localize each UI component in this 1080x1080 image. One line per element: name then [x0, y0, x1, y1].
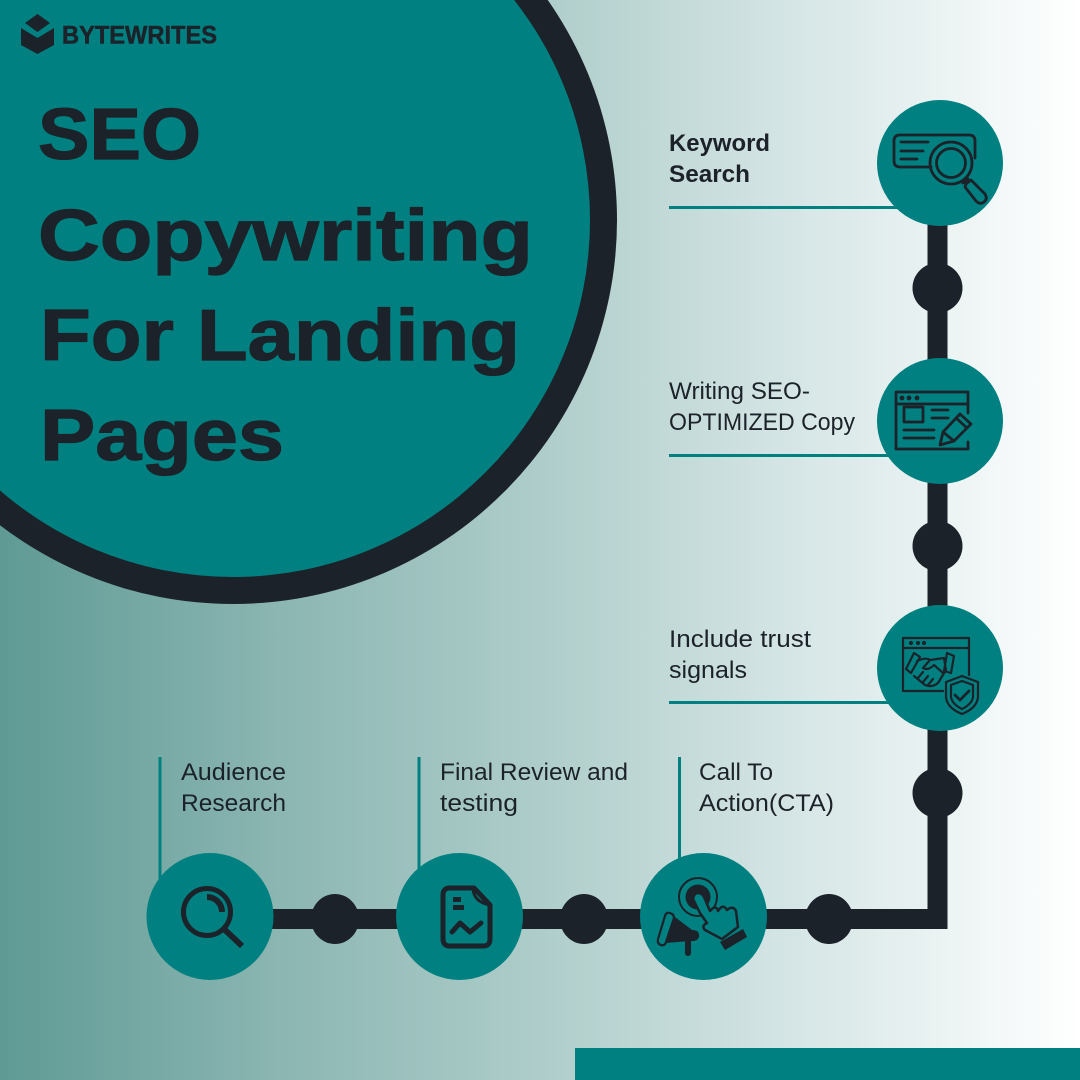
step: final review and testing	[396, 757, 628, 980]
timeline dots	[311, 263, 962, 944]
title panel circle	[0, 0, 617, 604]
icon: search document	[894, 135, 986, 203]
label: keyword search: Keyword	[669, 130, 770, 157]
icon: magnifying glass	[184, 888, 242, 946]
label: audience research: Research	[181, 790, 286, 817]
node circle	[640, 853, 767, 980]
step: call to action	[640, 757, 834, 980]
node circle	[146, 853, 274, 980]
title	[38, 95, 533, 476]
logo wordmark: BYTEWRITES	[62, 22, 217, 50]
logo	[21, 14, 217, 54]
label: writing copy: OPTIMIZED Copy	[669, 409, 855, 436]
icon: report document	[443, 888, 490, 946]
leader line	[418, 757, 420, 872]
icon: logo cube	[21, 14, 54, 54]
label: call to action: Call To	[699, 759, 773, 786]
label: keyword search: Search	[669, 161, 750, 188]
icon: megaphone and pointing hand	[658, 878, 747, 953]
label: call to action: Action(CTA)	[699, 790, 834, 817]
node circle	[396, 853, 523, 980]
step: keyword search	[669, 100, 1003, 226]
step: writing SEO-optimized copy	[669, 358, 1003, 484]
label: trust signals: signals	[669, 657, 747, 684]
node circle	[877, 605, 1003, 731]
node circle	[877, 100, 1003, 226]
title: Pages	[40, 396, 284, 476]
step: include trust signals	[669, 605, 1003, 731]
title: Copywriting	[38, 196, 533, 276]
label: trust signals: Include trust	[669, 626, 811, 653]
leader line	[669, 701, 899, 704]
title: SEO	[38, 95, 201, 175]
icon: browser with pencil	[896, 392, 971, 449]
label: final review	[440, 759, 628, 817]
title: For Landing	[40, 296, 520, 376]
label: call to action	[699, 759, 834, 817]
label: final review: testing	[440, 790, 518, 817]
icon: handshake and shield	[903, 638, 978, 714]
label: audience research: Audience	[181, 759, 286, 786]
leader line	[678, 757, 681, 867]
leader line	[669, 454, 899, 457]
label: audience research	[181, 759, 286, 817]
node circle	[877, 358, 1003, 484]
step: audience research	[146, 757, 286, 980]
label: final review: Final Review and	[440, 759, 628, 786]
connector path	[210, 163, 938, 919]
label: writing copy	[669, 378, 855, 436]
label: keyword search	[669, 130, 770, 188]
label: trust signals	[669, 626, 811, 684]
label: writing copy: Writing SEO-	[669, 378, 810, 405]
leader line	[158, 757, 162, 879]
bottom accent bar	[575, 1048, 1080, 1080]
leader line	[669, 206, 899, 209]
